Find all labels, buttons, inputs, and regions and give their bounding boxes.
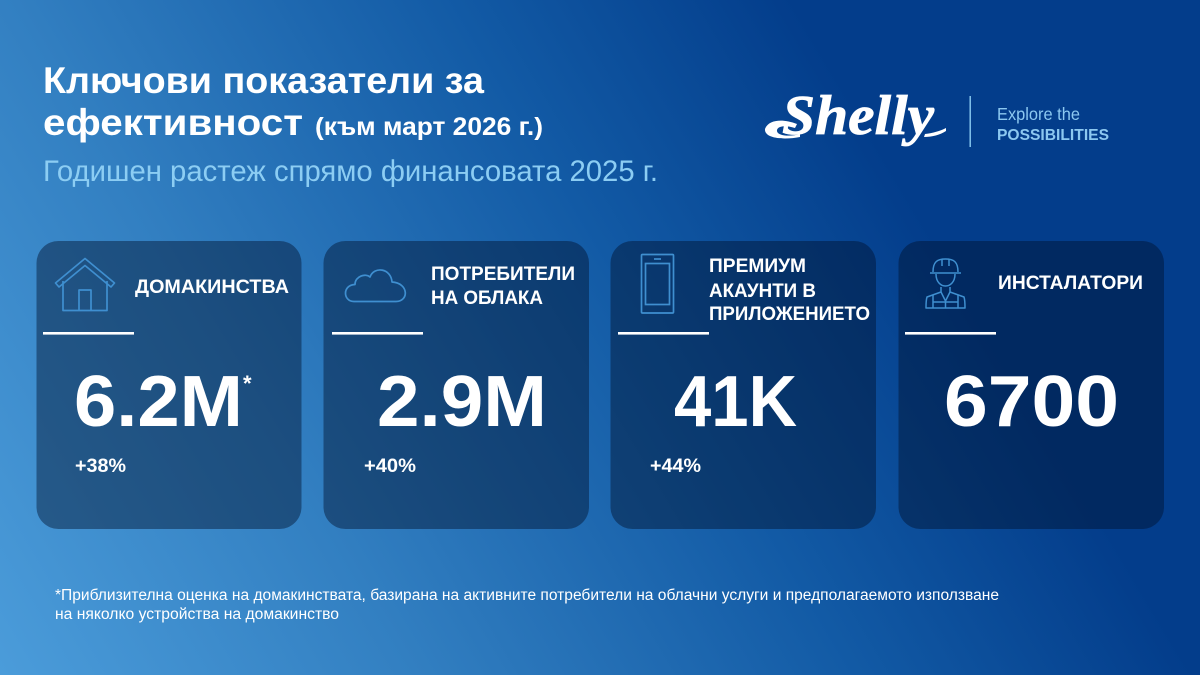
tagline: POSSIBILITIES bbox=[997, 127, 1109, 144]
card background bbox=[610, 241, 876, 529]
panel: cloud users bbox=[324, 241, 589, 529]
label: ПРЕМИУМ bbox=[709, 255, 806, 277]
panel: premium app accounts bbox=[610, 241, 876, 529]
icon: worker bbox=[926, 259, 965, 308]
tagline: Explore the bbox=[997, 104, 1080, 124]
tagline bbox=[997, 104, 1109, 144]
label bbox=[431, 263, 575, 309]
icon: cloud bbox=[346, 270, 405, 302]
label bbox=[709, 255, 870, 325]
footnote: на няколко устройства на домакинство bbox=[55, 606, 339, 623]
growth: +38% bbox=[75, 456, 126, 477]
footnote: *Приблизителна оценка на домакинствата, базирана на активните потребители на облачни услуги и предполагаемото използване bbox=[55, 587, 999, 604]
label: ДОМАКИНСТВА bbox=[135, 276, 289, 298]
title: ефективност bbox=[43, 102, 303, 143]
growth: +40% bbox=[364, 456, 416, 477]
title bbox=[43, 60, 543, 143]
value: 6700 bbox=[944, 362, 1119, 442]
panel: installers bbox=[898, 241, 1164, 529]
title: (към март 2026 г.) bbox=[315, 113, 543, 141]
title: Ключови показатели за bbox=[43, 60, 484, 101]
value: 6.2M bbox=[74, 362, 243, 442]
card background bbox=[36, 241, 302, 529]
label: НА ОБЛАКА bbox=[431, 287, 543, 309]
value: 41K bbox=[674, 362, 797, 442]
logo: Shelly: Shelly bbox=[782, 85, 935, 147]
card background bbox=[324, 241, 589, 529]
icon: house bbox=[56, 258, 114, 310]
label: АКАУНТИ В bbox=[709, 280, 816, 302]
footnote marker: * bbox=[243, 371, 252, 396]
footnote bbox=[55, 587, 999, 623]
subtitle: Годишен растеж спрямо финансовата 2025 г. bbox=[43, 155, 658, 188]
logo divider bbox=[970, 96, 971, 147]
panel: households bbox=[36, 241, 302, 529]
icon: phone bbox=[642, 254, 674, 313]
label: ИНСТАЛАТОРИ bbox=[998, 272, 1143, 294]
card background bbox=[898, 241, 1164, 529]
label: ПОТРЕБИТЕЛИ bbox=[431, 263, 575, 285]
growth: +44% bbox=[650, 456, 701, 477]
label: ПРИЛОЖЕНИЕТО bbox=[709, 303, 870, 325]
value: 2.9M bbox=[377, 362, 547, 442]
